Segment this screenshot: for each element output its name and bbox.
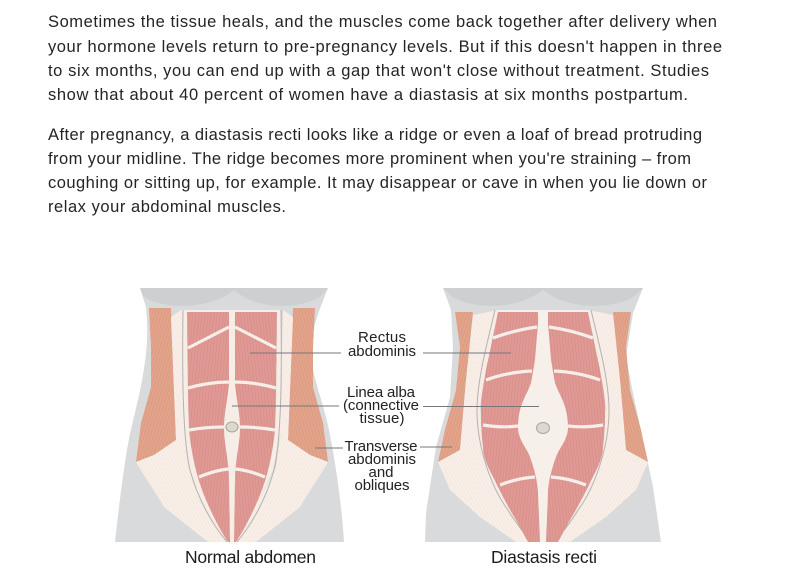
label: linea alba: tissue) [360,410,404,427]
leader lines [232,353,539,448]
paragraph: healing of the tissue: to six months, you can end up with a gap that won't close without treatment. Studies [48,62,709,80]
caption: normal abdomen: Normal abdomen [185,547,316,567]
paragraph: healing of the tissue: your hormone levels return to pre-pregnancy levels. But if this doesn't happen in three [48,38,722,56]
label: transverse abdominis and obliques: Transverse [344,438,418,455]
label: linea alba: (connective [343,397,419,414]
label: rectus abdominis: abdominis [348,343,416,360]
illustration: normal abdomen [115,288,344,542]
label: transverse abdominis and obliques: obliques [354,477,410,494]
paragraph: appearance after pregnancy: coughing or sitting up, for example. It may disappear or cave in when you lie down or [48,174,708,192]
label: transverse abdominis and obliques [344,438,418,494]
label: transverse abdominis and obliques: and [368,464,394,481]
paragraph: appearance after pregnancy [48,126,708,216]
icon: navel [226,422,238,432]
paragraph: appearance after pregnancy: relax your abdominal muscles. [48,198,286,216]
illustration: diastasis recti [425,288,661,542]
label: linea alba [343,384,419,427]
paragraph: healing of the tissue: Sometimes the tissue heals, and the muscles come back together after delivery when [48,13,717,31]
label: transverse abdominis and obliques: abdominis [348,451,416,468]
paragraph: appearance after pregnancy: After pregnancy, a diastasis recti looks like a ridge or even a loaf of bread protruding [48,126,702,144]
paragraph: healing of the tissue: show that about 40 percent of women have a diastasis at six months postpartum. [48,86,688,104]
caption: diastasis recti: Diastasis recti [491,547,597,567]
label: rectus abdominis [348,329,416,360]
label: rectus abdominis: Rectus [358,329,406,346]
label: linea alba: Linea alba [347,384,416,401]
icon: navel [536,422,550,434]
paragraph: appearance after pregnancy: from your midline. The ridge becomes more prominent when you're straining – from [48,150,691,168]
paragraph: healing of the tissue [48,13,722,104]
